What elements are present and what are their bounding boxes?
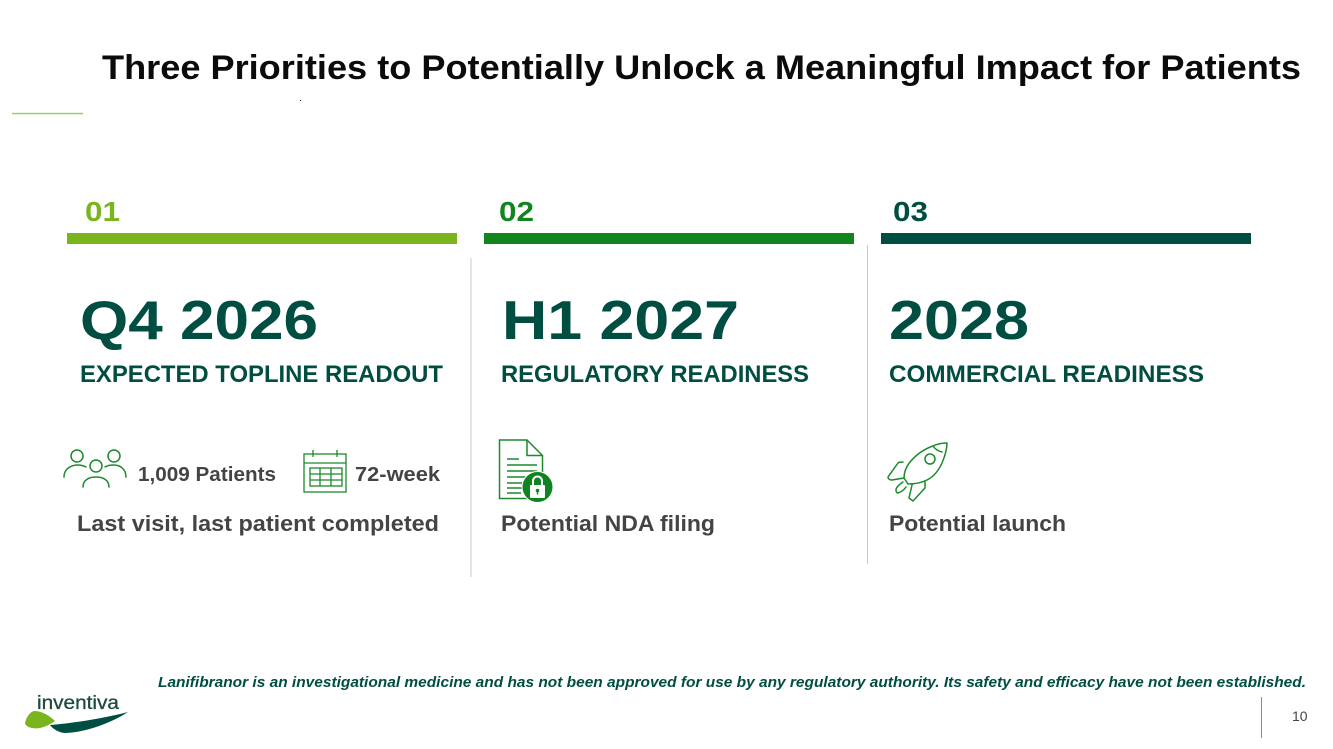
icon: locked document [500, 440, 554, 503]
title: Three Priorities to Potentially Unlock a Meaningful Impact for Patients [102, 49, 1301, 87]
logo: inventiva [25, 693, 128, 733]
panel: priority 03 [881, 196, 1251, 536]
title accent rule [12, 113, 83, 114]
divider 2 [867, 245, 868, 564]
header bar 02 [484, 233, 854, 244]
step number 02: 02 [499, 196, 534, 227]
date: 2028: 2028 [889, 289, 1029, 351]
icon: patients [64, 450, 126, 487]
description 03: Potential launch [889, 511, 1066, 536]
subheading: expected topline readout: EXPECTED TOPLINE READOUT [80, 361, 443, 388]
disclaimer: Lanifibranor is an investigational medicine and has not been approved for use by any regulatory authority. Its safety and efficacy have not been established. [158, 675, 1306, 691]
step number 03: 03 [893, 196, 928, 227]
icon: calendar [304, 450, 346, 492]
logo: inventiva: inventiva [37, 693, 119, 714]
page number: 10 [1292, 708, 1308, 724]
footer divider [1261, 697, 1262, 738]
patients count: 1,009 Patients [138, 464, 276, 486]
header bar 03 [881, 233, 1251, 244]
icon: rocket [888, 443, 947, 501]
subheading: regulatory readiness: REGULATORY READINESS [501, 361, 809, 388]
divider 1 [470, 258, 472, 577]
description 02: Potential NDA filing [501, 511, 715, 536]
study duration: 72-week [355, 464, 441, 486]
date: H1 2027: H1 2027 [502, 289, 739, 351]
description 01: Last visit, last patient completed [77, 511, 439, 536]
date: Q4 2026: Q4 2026 [80, 289, 318, 351]
header bar 01 [67, 233, 457, 244]
subheading: commercial readiness: COMMERCIAL READINESS [889, 361, 1204, 388]
step number 01: 01 [85, 196, 120, 227]
panel: priority 02 [484, 196, 854, 536]
panel: priority 01 [64, 196, 457, 536]
